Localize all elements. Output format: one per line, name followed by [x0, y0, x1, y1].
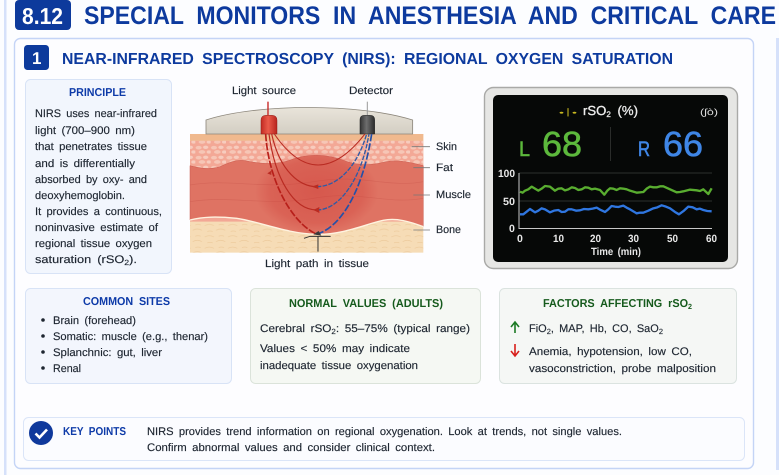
- increasing factors: FiO: [529, 323, 547, 335]
- x axis labels: 20: [590, 233, 601, 245]
- section heading: NEAR-INFRARED SPECTROSCOPY (NIRS): REGIONAL OXYGEN SATURATION: [62, 51, 673, 68]
- y axis labels: [498, 168, 515, 235]
- monitor header: [559, 103, 718, 119]
- increasing factors: 2: [547, 327, 551, 336]
- panel: principle: [26, 80, 172, 274]
- factors heading: 2: [688, 302, 692, 311]
- x axis labels: 50: [667, 233, 678, 245]
- normal values text: : 55–75% (typical range): [336, 323, 470, 335]
- left reading: L: [519, 138, 530, 161]
- principle body text: ).: [129, 254, 137, 266]
- common sites list: Brain (forehead): [53, 315, 136, 327]
- icon: check badge: [29, 421, 53, 445]
- label: fat: Fat: [436, 162, 453, 174]
- common sites list: Splanchnic: gut, liver: [53, 347, 162, 359]
- green trace: left: [520, 186, 712, 195]
- factors heading: FACTORS AFFECTING rSO: [543, 298, 695, 310]
- y axis labels: 0: [509, 223, 515, 235]
- y axis labels: 50: [503, 196, 515, 208]
- icon: down arrow: [511, 344, 519, 356]
- x axis labels: 30: [628, 233, 639, 245]
- principle body text: saturation (rSO: [35, 254, 112, 266]
- right reading: [638, 125, 703, 164]
- normal values text: 2: [331, 327, 336, 336]
- section heading: 1: [32, 49, 41, 68]
- panel: normal values: [250, 288, 480, 384]
- principle body text: light (700–900 nm): [35, 125, 135, 137]
- monitor header: •׀•: [559, 108, 578, 117]
- tissue layers: [190, 134, 423, 253]
- normal values text: inadequate tissue oxygenation: [260, 360, 418, 372]
- x axis labels: 60: [706, 233, 717, 245]
- panel: key points: [24, 418, 744, 460]
- principle body text: It provides a continuous,: [35, 206, 162, 218]
- normal values heading: NORMAL VALUES (ADULTS): [289, 298, 443, 310]
- label: muscle: Muscle: [436, 189, 471, 201]
- principle body text: noninvasive estimate of: [35, 222, 159, 234]
- principle body text: deoxyhemoglobin.: [35, 190, 125, 202]
- label: bone: Bone: [436, 224, 461, 236]
- increasing factors: , MAP, Hb, CO, SaO: [551, 323, 659, 335]
- label: light source: Light source: [232, 85, 296, 97]
- increasing factors: 2: [659, 327, 663, 336]
- x axis labels: [517, 233, 717, 245]
- trend chart: [498, 168, 717, 258]
- title banner: [15, 0, 776, 30]
- section number badge: 8.12: [22, 3, 63, 29]
- monitor header: (%): [611, 103, 638, 118]
- common sites list: [41, 315, 208, 375]
- decreasing factors: Anemia, hypotension, low CO,: [529, 346, 692, 358]
- principle body text: and is differentially: [35, 158, 136, 170]
- principle body text: absorbed by oxy- and: [35, 174, 147, 186]
- light paths: [266, 134, 372, 252]
- principle body text: regional tissue oxygen: [35, 238, 152, 250]
- probe housing: [206, 102, 413, 134]
- panel: common sites: [26, 288, 232, 384]
- normal values text: Cerebral rSO: [260, 323, 327, 335]
- icon: up arrow: [511, 322, 519, 333]
- right reading: 66: [663, 125, 703, 164]
- leader lines: [412, 147, 430, 230]
- key points text: [147, 426, 622, 454]
- caption: light path: Light path in tissue: [265, 258, 369, 270]
- normal values text: [260, 323, 470, 372]
- monitor header: 2: [606, 110, 611, 119]
- x axis labels: 10: [553, 233, 564, 245]
- axis title: Time (min): [591, 246, 641, 258]
- blue trace: right: [520, 205, 712, 214]
- left reading: [519, 125, 582, 164]
- right reading: R: [638, 138, 650, 161]
- section heading: [24, 45, 673, 70]
- key points text: Confirm abnormal values and consider clinical context.: [147, 442, 435, 454]
- common sites heading: COMMON SITES: [83, 296, 170, 308]
- decreasing factors: vasoconstriction, probe malposition: [529, 363, 716, 375]
- normal values text: Values < 50% may indicate: [260, 343, 410, 355]
- principle body text: [35, 108, 162, 267]
- label: skin: Skin: [436, 141, 457, 153]
- y axis labels: 100: [498, 168, 515, 180]
- principle body text: NIRS uses near-infrared: [35, 108, 157, 120]
- light source: [261, 115, 277, 134]
- monitor: [484, 88, 738, 268]
- principle heading: PRINCIPLE: [69, 87, 126, 99]
- panel: factors affecting rSO2: [500, 288, 736, 384]
- x axis labels: 0: [517, 233, 523, 245]
- principle body text: that penetrates tissue: [35, 141, 147, 153]
- left reading: 68: [542, 125, 582, 164]
- section number badge: [15, 0, 71, 30]
- monitor header: (ʃò): [700, 107, 718, 117]
- label: detector: Detector: [349, 85, 393, 97]
- key points heading: KEY POINTS: [63, 426, 126, 438]
- detector: [360, 115, 375, 134]
- common sites list: Somatic: muscle (e.g., thenar): [53, 331, 208, 343]
- key points text: NIRS provides trend information on regional oxygenation. Look at trends, not single values.: [147, 426, 622, 438]
- diagram: light path through tissue: [190, 85, 471, 270]
- decreasing factors: [529, 346, 716, 375]
- monitor header: rSO: [583, 103, 606, 118]
- common sites list: Renal: [53, 363, 81, 375]
- principle body text: 2: [124, 258, 129, 267]
